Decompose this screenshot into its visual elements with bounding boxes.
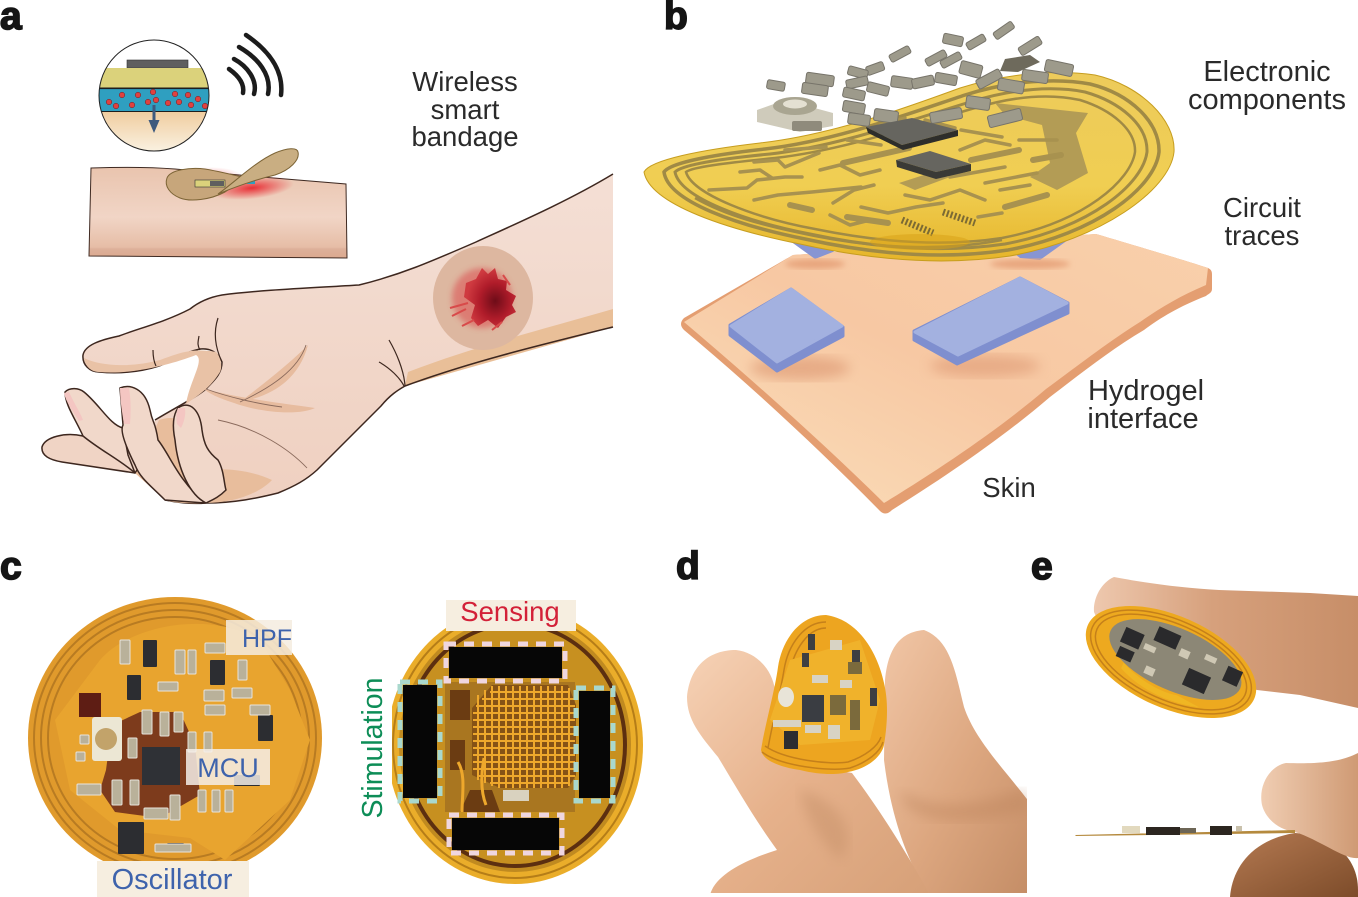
copper mesh region xyxy=(100,712,200,818)
panel: c, flexible circuit boards xyxy=(0,545,643,897)
stimulation pad right xyxy=(576,688,613,801)
adhesive bandage flap xyxy=(218,149,298,194)
label: hydrogel interface: Hydrogel xyxy=(1088,375,1204,407)
palm crease lines xyxy=(206,345,307,468)
label: circuit traces xyxy=(1223,192,1301,251)
hydrogel pads xyxy=(730,240,1070,371)
pad combs xyxy=(902,212,975,233)
ground plane trace xyxy=(995,103,1088,190)
label: hydrogel interface xyxy=(1087,375,1204,435)
palm and thumb shadow xyxy=(84,350,221,404)
label: wireless smart bandage: Wireless xyxy=(412,66,518,97)
panel: a, wireless smart bandage on arm xyxy=(0,0,613,503)
wound site xyxy=(433,246,533,350)
panel: e, device held and side profile xyxy=(1031,545,1358,897)
label box: MCU: MCU xyxy=(197,753,259,783)
panel letter d: d xyxy=(676,545,700,588)
right finger xyxy=(884,630,1030,895)
trimmer capacitor xyxy=(757,97,833,132)
finger three xyxy=(120,387,205,503)
finger two xyxy=(65,389,135,473)
label box: HPF xyxy=(226,620,292,655)
circuit sheet with traces xyxy=(644,73,1174,261)
label: circuit traces: Circuit xyxy=(1223,192,1301,223)
illustration: forearm and hand xyxy=(42,174,613,503)
panel letter e: e xyxy=(1031,545,1053,588)
photo: lower fingers holding device edge-on xyxy=(1075,753,1358,897)
wrapped device xyxy=(761,615,887,774)
skin layer xyxy=(681,234,1212,514)
antenna rings xyxy=(664,81,1159,255)
sensing pad top xyxy=(446,644,565,681)
label: wireless smart bandage: bandage xyxy=(411,121,519,152)
panel: d, device wrapped around fingers xyxy=(676,545,1030,895)
microcontroller chip xyxy=(142,747,180,785)
label: circuit traces: traces xyxy=(1225,220,1299,251)
photo: top finger holding device xyxy=(1069,577,1358,741)
finger four xyxy=(173,405,226,503)
label box: HPF: HPF xyxy=(242,625,292,653)
sensing pad bottom xyxy=(449,815,562,853)
panel: b, exploded device diagram xyxy=(644,0,1346,514)
electronic components xyxy=(757,21,1074,179)
label box: MCU xyxy=(186,749,270,785)
label box: Stimulation: Stimulation xyxy=(357,678,389,818)
label: wireless smart bandage: smart xyxy=(431,94,500,125)
copper mesh xyxy=(472,685,576,788)
adhesive bandage left lobe xyxy=(166,168,246,200)
inset arm with peeled bandage xyxy=(89,149,347,258)
label box: Sensing: Sensing xyxy=(460,596,560,627)
panel letter c: c xyxy=(0,545,22,588)
far finger xyxy=(42,435,150,473)
front of circuit board xyxy=(28,597,322,897)
left finger xyxy=(687,650,930,895)
stimulation pad left xyxy=(400,682,440,801)
label: hydrogel interface: interface xyxy=(1087,403,1199,435)
icon: bandage cross-section circle xyxy=(98,40,210,152)
surface components xyxy=(76,640,273,854)
small chip xyxy=(896,151,971,179)
pad shadows xyxy=(750,356,850,380)
label: skin: Skin xyxy=(982,472,1036,503)
label box: Oscillator: Oscillator xyxy=(112,864,233,896)
hand and arm skin xyxy=(83,174,613,503)
floating passive components xyxy=(766,21,1074,128)
photo: fingers holding device xyxy=(687,615,1030,895)
label: electronic components: components xyxy=(1188,84,1346,116)
trimmer capacitor xyxy=(92,717,122,761)
signal traces xyxy=(709,118,1057,225)
hand outline xyxy=(83,174,613,503)
label: wireless smart bandage xyxy=(411,66,519,152)
forearm underside shadow xyxy=(405,309,613,386)
large microcontroller chip xyxy=(866,118,958,150)
back of circuit board xyxy=(357,596,643,884)
icon: wireless signal arcs xyxy=(229,35,281,95)
finger nails xyxy=(64,388,185,428)
device face xyxy=(1069,583,1273,741)
label box: Sensing xyxy=(446,596,576,631)
label: electronic components xyxy=(1188,56,1346,116)
side-view strip xyxy=(1075,830,1295,836)
label: electronic components: Electronic xyxy=(1203,56,1331,88)
